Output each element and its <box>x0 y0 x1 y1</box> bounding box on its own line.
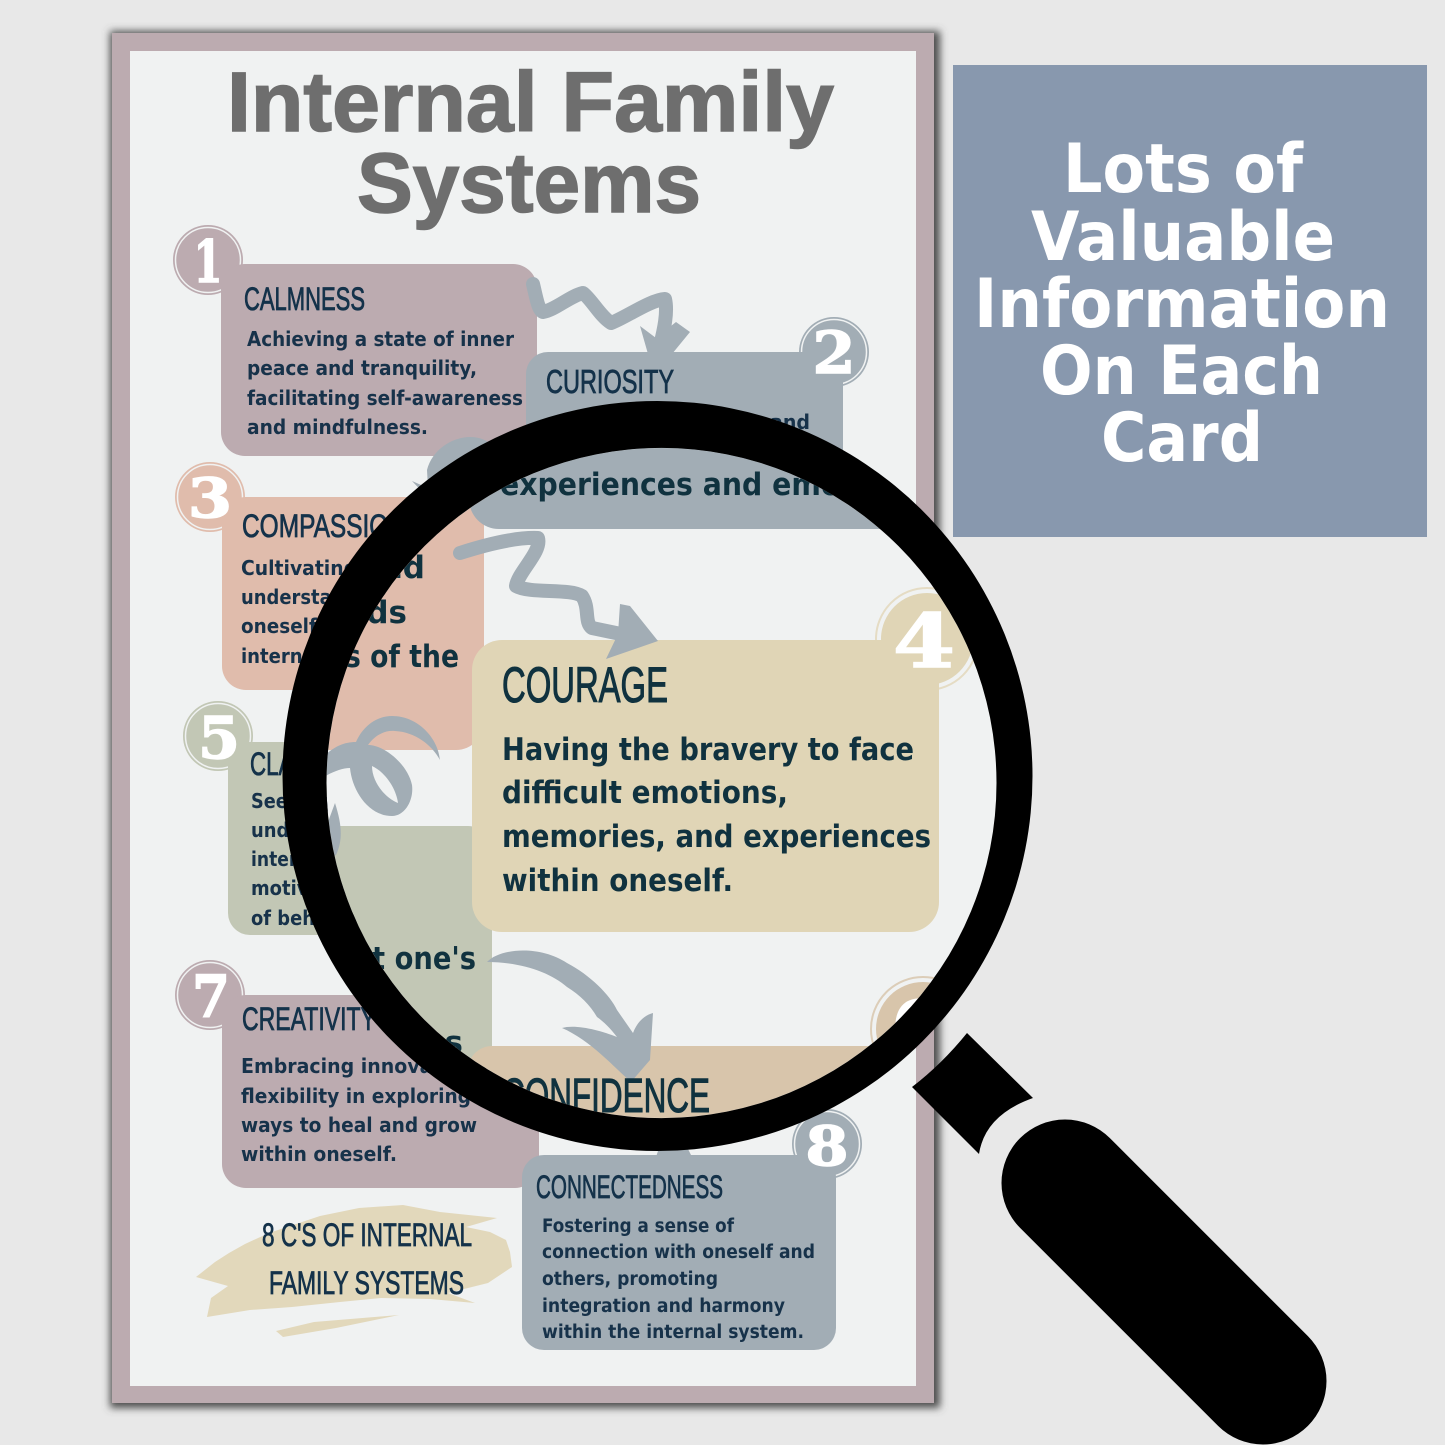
callout panel <box>953 65 1427 537</box>
lens: magnified courage card <box>472 588 978 932</box>
lens: looping arrow <box>320 716 440 860</box>
card 8: connectedness: connection with oneself and <box>542 1242 815 1263</box>
card 5: clarity: understanding <box>251 818 399 842</box>
card 1: calmness: facilitating self-awareness <box>247 386 523 410</box>
lens: magnified courage card: difficult emotions, <box>502 775 788 811</box>
card 7: creativity: CREATIVITY <box>242 1001 376 1037</box>
callout panel: Lots of <box>1063 130 1304 209</box>
card 8: connectedness: integration and harmony <box>542 1296 785 1317</box>
card 5: clarity: 5 <box>198 704 240 772</box>
card 1: calmness: and mindfulness. <box>247 415 428 439</box>
lens: curved arrow to confidence <box>487 950 653 1082</box>
brush label: 8 C's of Internal Family Systems: FAMILY SYSTEMS <box>269 1265 464 1301</box>
card 7: creativity: flexibility in exploring <box>241 1084 471 1108</box>
card 7: creativity: 7 <box>192 963 230 1031</box>
brush label: 8 C's of Internal Family Systems: 8 C'S OF INTERNAL <box>262 1217 472 1253</box>
card 8: connectedness: others, promoting <box>542 1269 718 1290</box>
card 2: curiosity <box>526 317 869 530</box>
card 8: connectedness: 8 <box>806 1114 848 1178</box>
card 2: curiosity: and <box>770 410 810 434</box>
lens: confidence heading: CONFIDENCE <box>502 1070 710 1123</box>
title <box>227 55 834 230</box>
card 7: creativity <box>175 960 539 1188</box>
card 8: connectedness: within the internal system. <box>542 1322 804 1343</box>
lens: magnified clarity card: s <box>445 1025 463 1061</box>
lens: magnified compassion card: nd <box>381 550 425 586</box>
poster <box>110 31 940 1408</box>
card 5: clarity: internal <box>251 847 327 871</box>
lens: magnified confidence card <box>471 976 934 1118</box>
lens: magnified courage card: 4 <box>893 599 955 685</box>
callout panel: On Each <box>1040 332 1323 411</box>
magnifier: ring and handle <box>282 401 1263 1381</box>
callout panel: Card <box>1101 399 1263 478</box>
callout panel: Information <box>974 265 1390 344</box>
arrow stub into card 8 <box>656 1145 692 1157</box>
card 1: calmness: 1 <box>194 228 222 296</box>
arrow: calmness to curiosity <box>533 284 690 354</box>
card 5: clarity: of behavior <box>251 906 366 930</box>
card 5: clarity <box>183 701 428 935</box>
card 7: creativity: Embracing innovation and <box>241 1054 521 1078</box>
card 3: compassion: COMPASSION <box>242 508 406 544</box>
card 1: calmness: peace and tranquility, <box>247 356 477 380</box>
lens: magnified clarity card: t one's <box>372 941 476 977</box>
lens: magnified courage card: Having the bravery to face <box>502 732 914 768</box>
lens: magnified clarity card <box>334 826 492 1068</box>
lens: magnified confidence card: 6 <box>891 986 943 1072</box>
title: Internal Family <box>227 55 834 149</box>
card 3: compassion: Cultivating <box>241 556 357 580</box>
card 7: creativity: within oneself. <box>241 1142 397 1166</box>
lens: magnified curiosity card: experiences and emotions <box>500 467 920 503</box>
callout panel: Valuable <box>1031 198 1335 277</box>
card 8: connectedness: Fostering a sense of <box>542 1216 735 1237</box>
arrow fragment: curiosity to compassion <box>412 437 500 520</box>
card 8: connectedness: CONNECTEDNESS <box>536 1169 723 1205</box>
card 5: clarity: Seeking <box>251 789 331 813</box>
magnifier lens contents <box>326 448 996 1118</box>
card 3: compassion: oneself <box>241 614 317 638</box>
lens: magnified compassion card <box>328 499 484 750</box>
lens: magnified compassion card: ds <box>366 595 407 631</box>
card 3: compassion: 3 <box>188 466 232 530</box>
card 3: compassion: understanding <box>241 585 389 609</box>
card 5: clarity: CLARITY <box>250 746 344 782</box>
card 1: calmness: CALMNESS <box>244 281 365 317</box>
card 8: connectedness <box>522 1109 862 1350</box>
card 7: creativity: ways to heal and grow <box>241 1113 477 1137</box>
card 2: curiosity: CURIOSITY <box>546 363 674 400</box>
lens: magnified curiosity card <box>470 448 880 529</box>
lens: magnified courage card: COURAGE <box>502 657 668 713</box>
brush label: 8 C's of Internal Family Systems <box>196 1205 512 1337</box>
card 1: calmness: Achieving a state of inner <box>247 327 514 351</box>
lens: magnified courage card: within oneself. <box>502 863 733 899</box>
card 1: calmness <box>173 225 537 456</box>
card 2: curiosity: 2 <box>812 319 856 387</box>
card 5: clarity: motivations <box>251 876 371 900</box>
title: Systems <box>357 136 701 230</box>
lens: arrow to courage <box>460 538 658 659</box>
lens: magnified courage card: memories, and experiences <box>502 819 931 855</box>
card 3: compassion <box>175 462 485 690</box>
lens: magnified compassion card: s of the <box>345 639 459 675</box>
card 3: compassion: internal <box>241 644 321 668</box>
